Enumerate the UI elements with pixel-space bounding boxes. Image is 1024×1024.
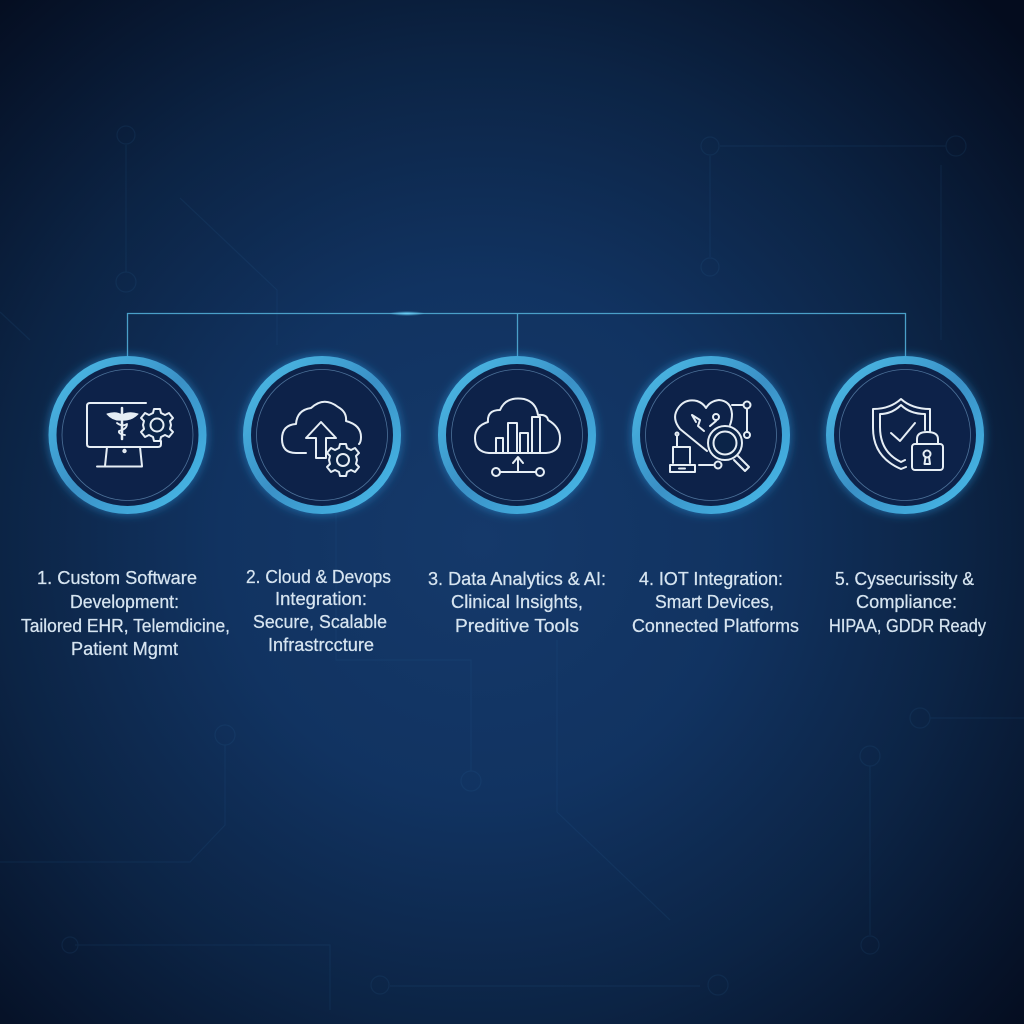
text: item 4 <box>632 569 799 636</box>
connector lines <box>128 311 906 358</box>
text: item 5: 5. Cysecurissity & <box>835 569 974 589</box>
icon: heart, magnifier, laptop <box>670 400 750 472</box>
text: item 1: Development: <box>70 592 179 612</box>
text: item 3: 3. Data Analytics & AI: <box>428 569 606 589</box>
text: item 4: Connected Platforms <box>632 616 799 636</box>
text: item 3: Preditive Tools <box>455 616 579 636</box>
text: item 4: Smart Devices, <box>655 592 774 612</box>
ring 3 <box>442 360 592 510</box>
ring 1 <box>52 360 202 510</box>
text: item 3: Clinical Insights, <box>451 592 583 612</box>
panel: cybersecurity and compliance <box>829 360 986 636</box>
text: item 2 <box>246 567 391 655</box>
panel: custom software development <box>21 360 230 659</box>
text: item 1: Patient Mgmt <box>71 639 178 659</box>
ring 4 <box>636 360 786 510</box>
text: item 1: Tailored EHR, Telemdicine, <box>21 616 230 636</box>
text: item 4: 4. IOT Integration: <box>639 569 783 589</box>
panel: data analytics and AI <box>428 360 606 636</box>
text: item 1: 1. Custom Software <box>37 568 197 588</box>
text: item 5: Compliance: <box>856 592 957 612</box>
text: item 2: Secure, Scalable <box>253 612 387 632</box>
text: item 5: HIPAA, GDDR Ready <box>829 616 986 636</box>
icon: cloud upload with gear <box>282 402 361 476</box>
text: item 3 <box>428 569 606 636</box>
icon: shield with lock <box>873 399 943 470</box>
icon: cloud with bars <box>475 398 560 476</box>
text: item 2: Infrastrccture <box>268 635 374 655</box>
ring 2 <box>247 360 397 510</box>
text: item 2: Integration: <box>275 589 367 609</box>
panel: IoT integration <box>632 360 799 636</box>
icon: monitor with caduceus and gear <box>87 403 173 466</box>
panel: cloud and devops <box>246 360 397 655</box>
text: item 2: 2. Cloud & Devops <box>246 567 391 587</box>
ring 5 <box>830 360 980 510</box>
text: item 5 <box>829 569 986 636</box>
text: item 1 <box>21 568 230 659</box>
